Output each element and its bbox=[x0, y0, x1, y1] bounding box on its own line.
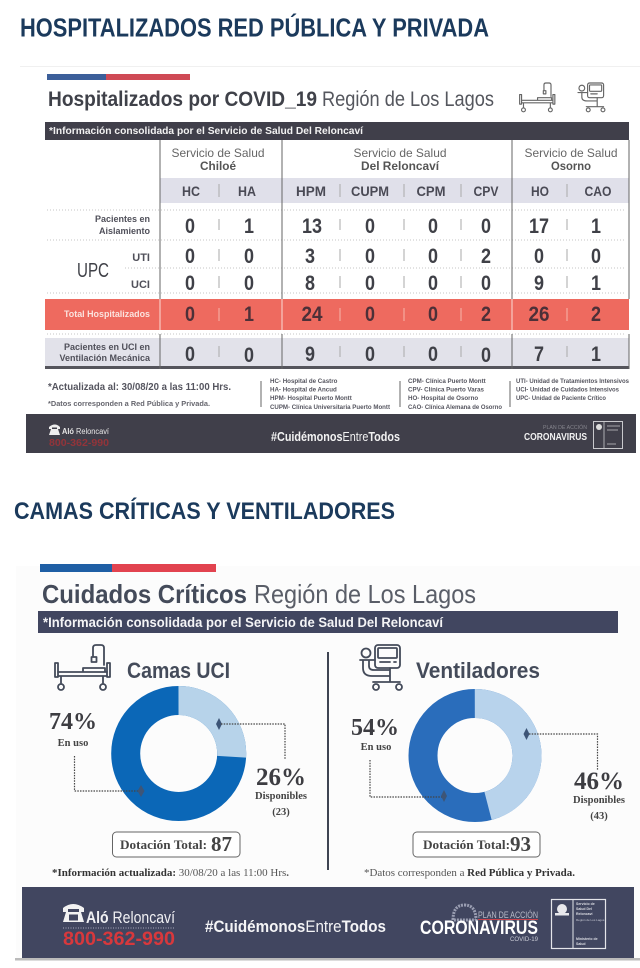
hospital code headers: CPV bbox=[474, 184, 498, 199]
title: camas críticas: CAMAS CRÍTICAS Y VENTILADORES bbox=[14, 497, 395, 525]
heading: ventiladores: Ventiladores bbox=[416, 658, 540, 683]
row: UCI: 8 bbox=[305, 272, 315, 295]
logo: ministerio: Ministerio de bbox=[576, 937, 598, 941]
callout: 46% disponibles: (43) bbox=[590, 811, 608, 822]
row: pacientes en aislamiento: 1 bbox=[244, 215, 254, 238]
footer banner: bottom: CORONAVIRUS bbox=[420, 918, 538, 939]
info bar bbox=[45, 122, 629, 140]
title: hospitalizados: HOSPITALIZADOS RED PÚBLICA Y PRIVADA bbox=[20, 12, 489, 42]
callout: 74% en uso: En uso bbox=[58, 738, 88, 749]
legend: abbreviations: UTI- Unidad de Tratamientos Intensivos bbox=[516, 378, 630, 385]
legend: abbreviations: CPV- Clínica Puerto Varas bbox=[408, 386, 485, 394]
critical care heading: Cuidados Críticos bbox=[42, 579, 247, 609]
row: total hospitalizados: 0 bbox=[428, 303, 438, 326]
row: UCI: 0 bbox=[428, 272, 438, 295]
footer banner: bottom: 800-362-990 bbox=[63, 928, 175, 950]
row: UTI: 0 bbox=[185, 245, 195, 268]
legend: abbreviations: HA- Hospital de Ancud bbox=[270, 386, 337, 394]
grey ventilation band bbox=[45, 338, 629, 366]
row labels: Aislamiento bbox=[99, 226, 150, 236]
panel: critical care card bbox=[15, 564, 640, 960]
box: dotación total 87: Dotación Total: bbox=[120, 838, 207, 852]
hospital code headers: CPM bbox=[416, 184, 446, 199]
column group: Del Reloncaví: Servicio de Salud bbox=[354, 146, 446, 160]
footer banner: top bbox=[26, 414, 636, 453]
column group: Del Reloncaví: Del Reloncaví bbox=[361, 159, 440, 173]
logo: ministerio: Salud Del bbox=[576, 907, 592, 911]
footer banner: top: Aló Reloncaví bbox=[62, 427, 110, 436]
column group: Osorno: Servicio de Salud bbox=[524, 146, 618, 160]
row: pacientes en aislamiento: 1 bbox=[591, 215, 601, 238]
row: total hospitalizados: 2 bbox=[481, 303, 491, 326]
logo: ministerio: Salud bbox=[576, 942, 586, 946]
row labels: Pacientes en UCI en bbox=[64, 342, 150, 352]
row labels: Ventilación Mecánica bbox=[59, 353, 151, 363]
row: ventilación mecánica: 1 bbox=[591, 343, 601, 366]
callout: 54% en uso: 54% bbox=[351, 715, 399, 741]
update notes: *Actualizada al: 30/08/20 a las 11:00 Hrs. bbox=[48, 382, 231, 393]
donut: ventiladores bbox=[423, 704, 527, 808]
callout: 46% disponibles bbox=[524, 728, 625, 822]
info bar bbox=[38, 611, 618, 633]
row: total hospitalizados: 24 bbox=[302, 303, 323, 326]
row: ventilación mecánica: 0 bbox=[365, 343, 375, 366]
row: UTI bbox=[185, 245, 601, 268]
hospital code headers: CAO bbox=[584, 184, 612, 199]
column group: Osorno bbox=[524, 146, 618, 173]
note: datos corresponden: *Datos corresponden a Red Pública y Privada. bbox=[364, 868, 575, 879]
row: UCI: 0 bbox=[365, 272, 375, 295]
row: ventilación mecánica: 9 bbox=[305, 343, 315, 366]
row: ventilación mecánica: 0 bbox=[428, 343, 438, 366]
row labels: Total Hospitalizados bbox=[64, 309, 150, 319]
logo: ministerio: Servicio de bbox=[576, 902, 595, 906]
callout: 26% disponibles: (23) bbox=[272, 807, 290, 818]
info bar: *Información consolidada por el Servicio de Salud Del Reloncaví bbox=[49, 126, 364, 137]
row: UCI: 9 bbox=[534, 272, 544, 295]
box: dotación total 93: 93 bbox=[510, 832, 531, 856]
footer banner: bottom: COVID-19 bbox=[510, 936, 538, 943]
divider bbox=[327, 652, 329, 870]
callout: 46% disponibles: Disponibles bbox=[573, 795, 625, 806]
row: total hospitalizados: 26 bbox=[528, 303, 550, 326]
row: pacientes en aislamiento: 0 bbox=[185, 215, 195, 238]
box: dotación total 93 bbox=[413, 832, 540, 857]
legend: abbreviations: HPM- Hospital Puerto Montt bbox=[270, 395, 352, 402]
row: UTI: 0 bbox=[244, 245, 254, 268]
hospital code headers: HA bbox=[238, 184, 256, 199]
footer banner: top: PLAN DE ACCIÓN bbox=[543, 424, 587, 431]
critical care heading bbox=[42, 579, 476, 609]
row: UCI: 1 bbox=[591, 272, 601, 295]
row labels bbox=[59, 214, 151, 363]
info bar: *Información consolidada por el Servicio de Salud Del Reloncaví bbox=[43, 615, 444, 630]
row: total hospitalizados: 2 bbox=[591, 303, 601, 326]
row: ventilación mecánica: 7 bbox=[534, 343, 544, 366]
icon: hospital bed bbox=[520, 83, 555, 112]
icon: ventilator bbox=[360, 645, 402, 690]
heading region: Región de Los Lagos bbox=[322, 88, 494, 111]
legend: abbreviations bbox=[261, 378, 630, 411]
row: UTI: 0 bbox=[428, 245, 438, 268]
panel: hospitalized table card bbox=[20, 66, 640, 453]
row: UCI: 0 bbox=[244, 272, 254, 295]
legend: abbreviations: HO- Hospital de Osorno bbox=[408, 395, 478, 402]
sub-header band bbox=[160, 178, 629, 203]
row: UTI: 0 bbox=[591, 245, 601, 268]
box: dotación total 87 bbox=[112, 832, 240, 857]
row: total hospitalizados: 0 bbox=[365, 303, 375, 326]
hospital code headers: HC bbox=[182, 184, 200, 199]
row: UTI: 2 bbox=[481, 245, 491, 268]
callout: 26% disponibles bbox=[216, 718, 307, 818]
legend: abbreviations: CAO- Clínica Alemana de Osorno bbox=[408, 404, 502, 411]
footer banner: top: #CuidémonosEntreTodos bbox=[271, 430, 400, 444]
footer banner: top: CORONAVIRUS bbox=[524, 432, 587, 443]
row: pacientes en aislamiento: 13 bbox=[302, 215, 322, 238]
hospital code headers bbox=[182, 184, 612, 199]
logo: ministerio: Región de Los Lagos bbox=[576, 918, 605, 922]
row: total hospitalizados: 1 bbox=[244, 303, 254, 326]
footer banner: top: 800-362-990 bbox=[49, 438, 109, 449]
hospital code headers: HPM bbox=[296, 184, 326, 199]
row: UCI: 0 bbox=[185, 272, 195, 295]
icon: plan de acción globe bbox=[453, 905, 476, 920]
logo: ministerio: Reloncaví bbox=[576, 912, 594, 916]
row: ventilación mecánica: 0 bbox=[185, 343, 195, 366]
icon: phone bbox=[63, 904, 84, 922]
row labels: UCI bbox=[131, 279, 150, 291]
hospital code headers: HO bbox=[531, 184, 549, 199]
icon: ventilator bbox=[578, 83, 605, 112]
row: total hospitalizados bbox=[185, 303, 601, 326]
icon: bed bbox=[55, 645, 110, 690]
logo: ministerio bbox=[552, 900, 606, 948]
column group: Del Reloncaví bbox=[354, 146, 446, 173]
table heading: Hospitalizados por COVID_19 bbox=[48, 88, 317, 111]
legend: abbreviations: UCI- Unidad de Cuidados Intensivos bbox=[516, 386, 620, 394]
legend: abbreviations: CPM- Clínica Puerto Montt bbox=[408, 378, 486, 385]
column group: Chiloé: Chiloé bbox=[200, 159, 236, 173]
row: ventilación mecánica: 0 bbox=[481, 344, 491, 367]
footer banner: bottom: Aló Reloncaví bbox=[86, 909, 175, 927]
row labels: Pacientes en bbox=[95, 214, 150, 224]
row: pacientes en aislamiento: 17 bbox=[529, 215, 549, 238]
red total band bbox=[45, 299, 629, 330]
row: UCI: 0 bbox=[481, 272, 491, 295]
column group: Chiloé: Servicio de Salud bbox=[172, 146, 264, 160]
flag bar bbox=[40, 564, 216, 572]
callout: 54% en uso bbox=[351, 715, 447, 802]
update notes bbox=[48, 382, 231, 408]
row: ventilación mecánica: 0 bbox=[244, 344, 254, 367]
legend: abbreviations: CUPM- Clínica Universitaria Puerto Montt bbox=[270, 404, 390, 411]
callout: 74% en uso bbox=[49, 709, 144, 797]
box: dotación total 87: 87 bbox=[211, 832, 232, 856]
note: información actualizada: *Información actualizada: 30/08/20 a las 11:00 Hrs . bbox=[52, 868, 289, 879]
heading: camas UCI: Camas UCI bbox=[127, 658, 230, 683]
row: UTI: 0 bbox=[534, 245, 544, 268]
row: pacientes en aislamiento: 0 bbox=[365, 215, 375, 238]
footer banner: bottom bbox=[15, 887, 640, 960]
column group: Osorno: Osorno bbox=[551, 159, 591, 173]
callout: 74% en uso: 74% bbox=[49, 709, 97, 735]
row: ventilación mecánica bbox=[185, 343, 601, 367]
row: UTI: 0 bbox=[365, 245, 375, 268]
hospital code headers: CUPM bbox=[351, 184, 389, 199]
column group: Chiloé bbox=[172, 146, 264, 173]
row labels: UPC bbox=[77, 260, 109, 282]
legend: abbreviations: HC- Hospital de Castro bbox=[270, 378, 338, 385]
icon: phone bbox=[49, 424, 60, 435]
update notes: *Datos corresponden a Red Pública y Privada. bbox=[48, 399, 210, 408]
row: UCI bbox=[185, 272, 601, 295]
legend: abbreviations: UPC- Unidad de Paciente Crítico bbox=[516, 395, 606, 402]
row: UTI: 3 bbox=[305, 245, 315, 268]
callout: 26% disponibles: Disponibles bbox=[255, 791, 307, 802]
callout: 26% disponibles: 26% bbox=[256, 764, 306, 791]
row labels: UTI bbox=[132, 252, 150, 264]
row: total hospitalizados: 0 bbox=[185, 303, 195, 326]
row: pacientes en aislamiento: 0 bbox=[481, 215, 491, 238]
critical care heading: Región de Los Lagos bbox=[254, 579, 476, 609]
footer banner: bottom: PLAN DE ACCIÓN bbox=[478, 910, 538, 920]
row: pacientes en aislamiento bbox=[185, 215, 601, 238]
flag bar bbox=[47, 74, 190, 80]
footer banner: bottom: #CuidémonosEntreTodos bbox=[205, 918, 386, 936]
box: dotación total 93: Dotación Total: bbox=[423, 838, 510, 852]
callout: 54% en uso: En uso bbox=[361, 742, 391, 753]
callout: 46% disponibles: 46% bbox=[574, 768, 624, 795]
row: pacientes en aislamiento: 0 bbox=[428, 215, 438, 238]
donut: camas UCI bbox=[126, 700, 232, 806]
